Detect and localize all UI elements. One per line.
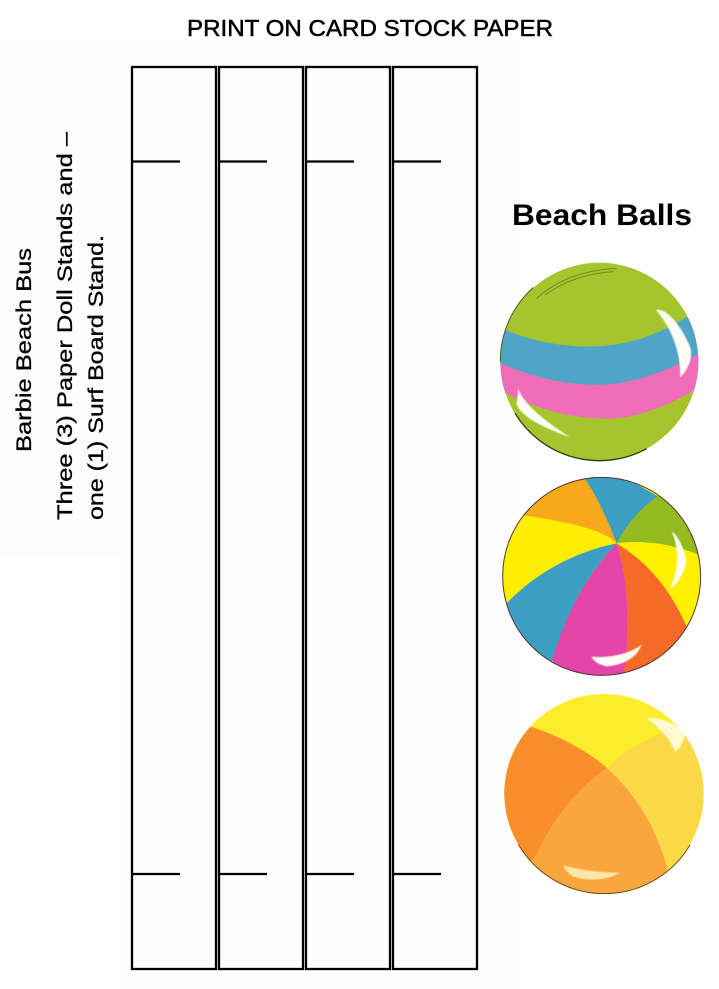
vertical label: Barbie Beach Bus: Barbie Beach Bus — [13, 248, 36, 452]
vertical description: one (1) Surf Board Stand. — [85, 235, 108, 520]
title: PRINT ON CARD STOCK PAPER — [187, 15, 553, 41]
vertical description: Three (3) Paper Doll Stands and – — [54, 132, 77, 520]
stand strip 4 — [393, 67, 477, 969]
icon: multicolour panel beach ball — [502, 476, 702, 676]
heading: Beach Balls: Beach Balls — [512, 199, 692, 232]
icon: striped beach ball — [500, 262, 698, 462]
stand strip 2 — [219, 67, 303, 969]
stand strip 1 — [132, 67, 216, 969]
stand strip 3 — [306, 67, 390, 969]
vertical description — [54, 132, 108, 520]
icon: orange and yellow beach ball — [504, 694, 704, 894]
